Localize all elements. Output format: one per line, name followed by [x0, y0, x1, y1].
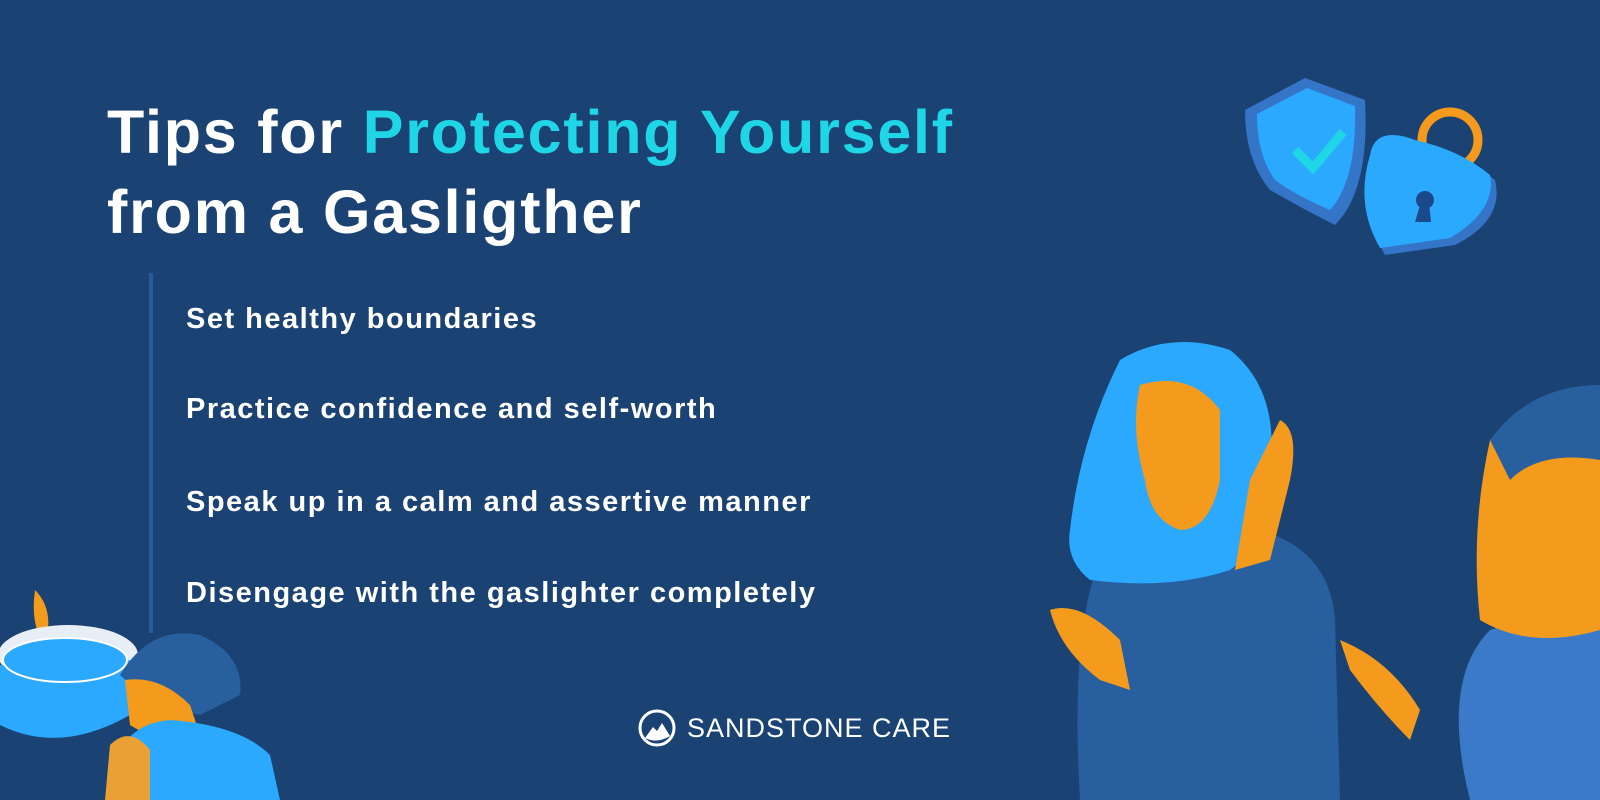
- title: [107, 98, 954, 246]
- tip list: [186, 303, 816, 609]
- tip 3: Speak up in a calm and assertive manner: [186, 486, 812, 518]
- title: from a Gasligther: [107, 178, 643, 246]
- icon: shield and heart lock: [1245, 78, 1497, 255]
- logo: SANDSTONE CARE: [687, 713, 951, 743]
- tip 2: Practice confidence and self-worth: [186, 393, 717, 425]
- logo: [638, 710, 951, 746]
- tip 1: Set healthy boundaries: [186, 303, 538, 335]
- illustration: candle and person: [0, 590, 280, 800]
- title: Tips for Protecting Yourself: [107, 98, 954, 166]
- tip 4: Disengage with the gaslighter completely: [186, 577, 816, 609]
- divider line: [149, 273, 153, 633]
- illustration: woman with hand raised: [1050, 342, 1600, 800]
